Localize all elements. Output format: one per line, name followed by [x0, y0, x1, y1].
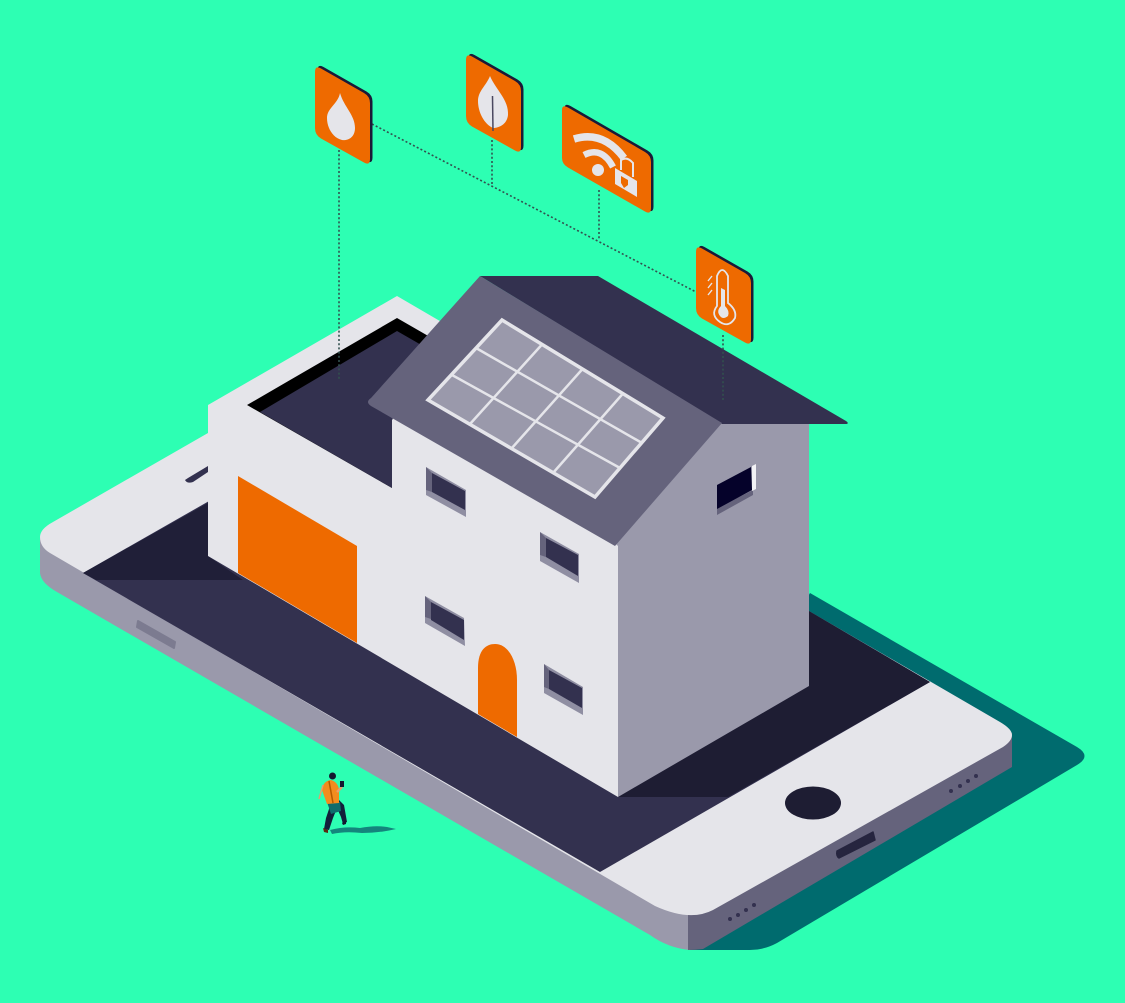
phone screen: [83, 392, 930, 872]
roof front slope: [368, 276, 722, 546]
person shadow: [330, 826, 396, 834]
garage door: [238, 476, 357, 643]
home button: [785, 786, 841, 820]
window upper right: [540, 532, 579, 583]
phone cast shadow: [690, 593, 1084, 950]
solar panel: [428, 320, 663, 497]
house: [208, 276, 848, 797]
garage roof recess: [247, 318, 430, 488]
phone left side edge: [40, 530, 690, 950]
window upper left: [426, 467, 466, 517]
speaker dots right: [949, 774, 978, 793]
icon: water drop: [327, 93, 355, 140]
front door: [478, 644, 517, 737]
icon: wifi with padlock: [574, 137, 637, 197]
front wall with garage: [208, 296, 618, 797]
roof dark slope: [480, 276, 848, 424]
smartphone: [40, 378, 1012, 950]
side gable wall: [612, 418, 809, 797]
window lower left: [425, 596, 465, 646]
phone right side edge: [688, 733, 1012, 950]
connector lines: [339, 124, 723, 400]
tile: thermometer: [696, 246, 754, 344]
charging port: [837, 832, 875, 858]
garage flat roof: [260, 331, 430, 488]
speaker dots left: [728, 903, 756, 921]
tile: water drop: [315, 66, 372, 164]
icon: thermometer: [708, 270, 735, 324]
house shadow on screen, right: [618, 610, 930, 797]
person walking: [319, 772, 396, 834]
phone top surface: [40, 378, 1012, 915]
tile: wifi security: [562, 105, 654, 213]
earpiece slot: [185, 466, 208, 483]
icon: leaf: [478, 76, 508, 131]
left side speaker slot: [137, 621, 175, 648]
house shadow on screen, left: [83, 503, 243, 580]
tile: leaf: [466, 54, 524, 152]
gable window: [717, 464, 756, 515]
window lower right: [544, 664, 583, 715]
